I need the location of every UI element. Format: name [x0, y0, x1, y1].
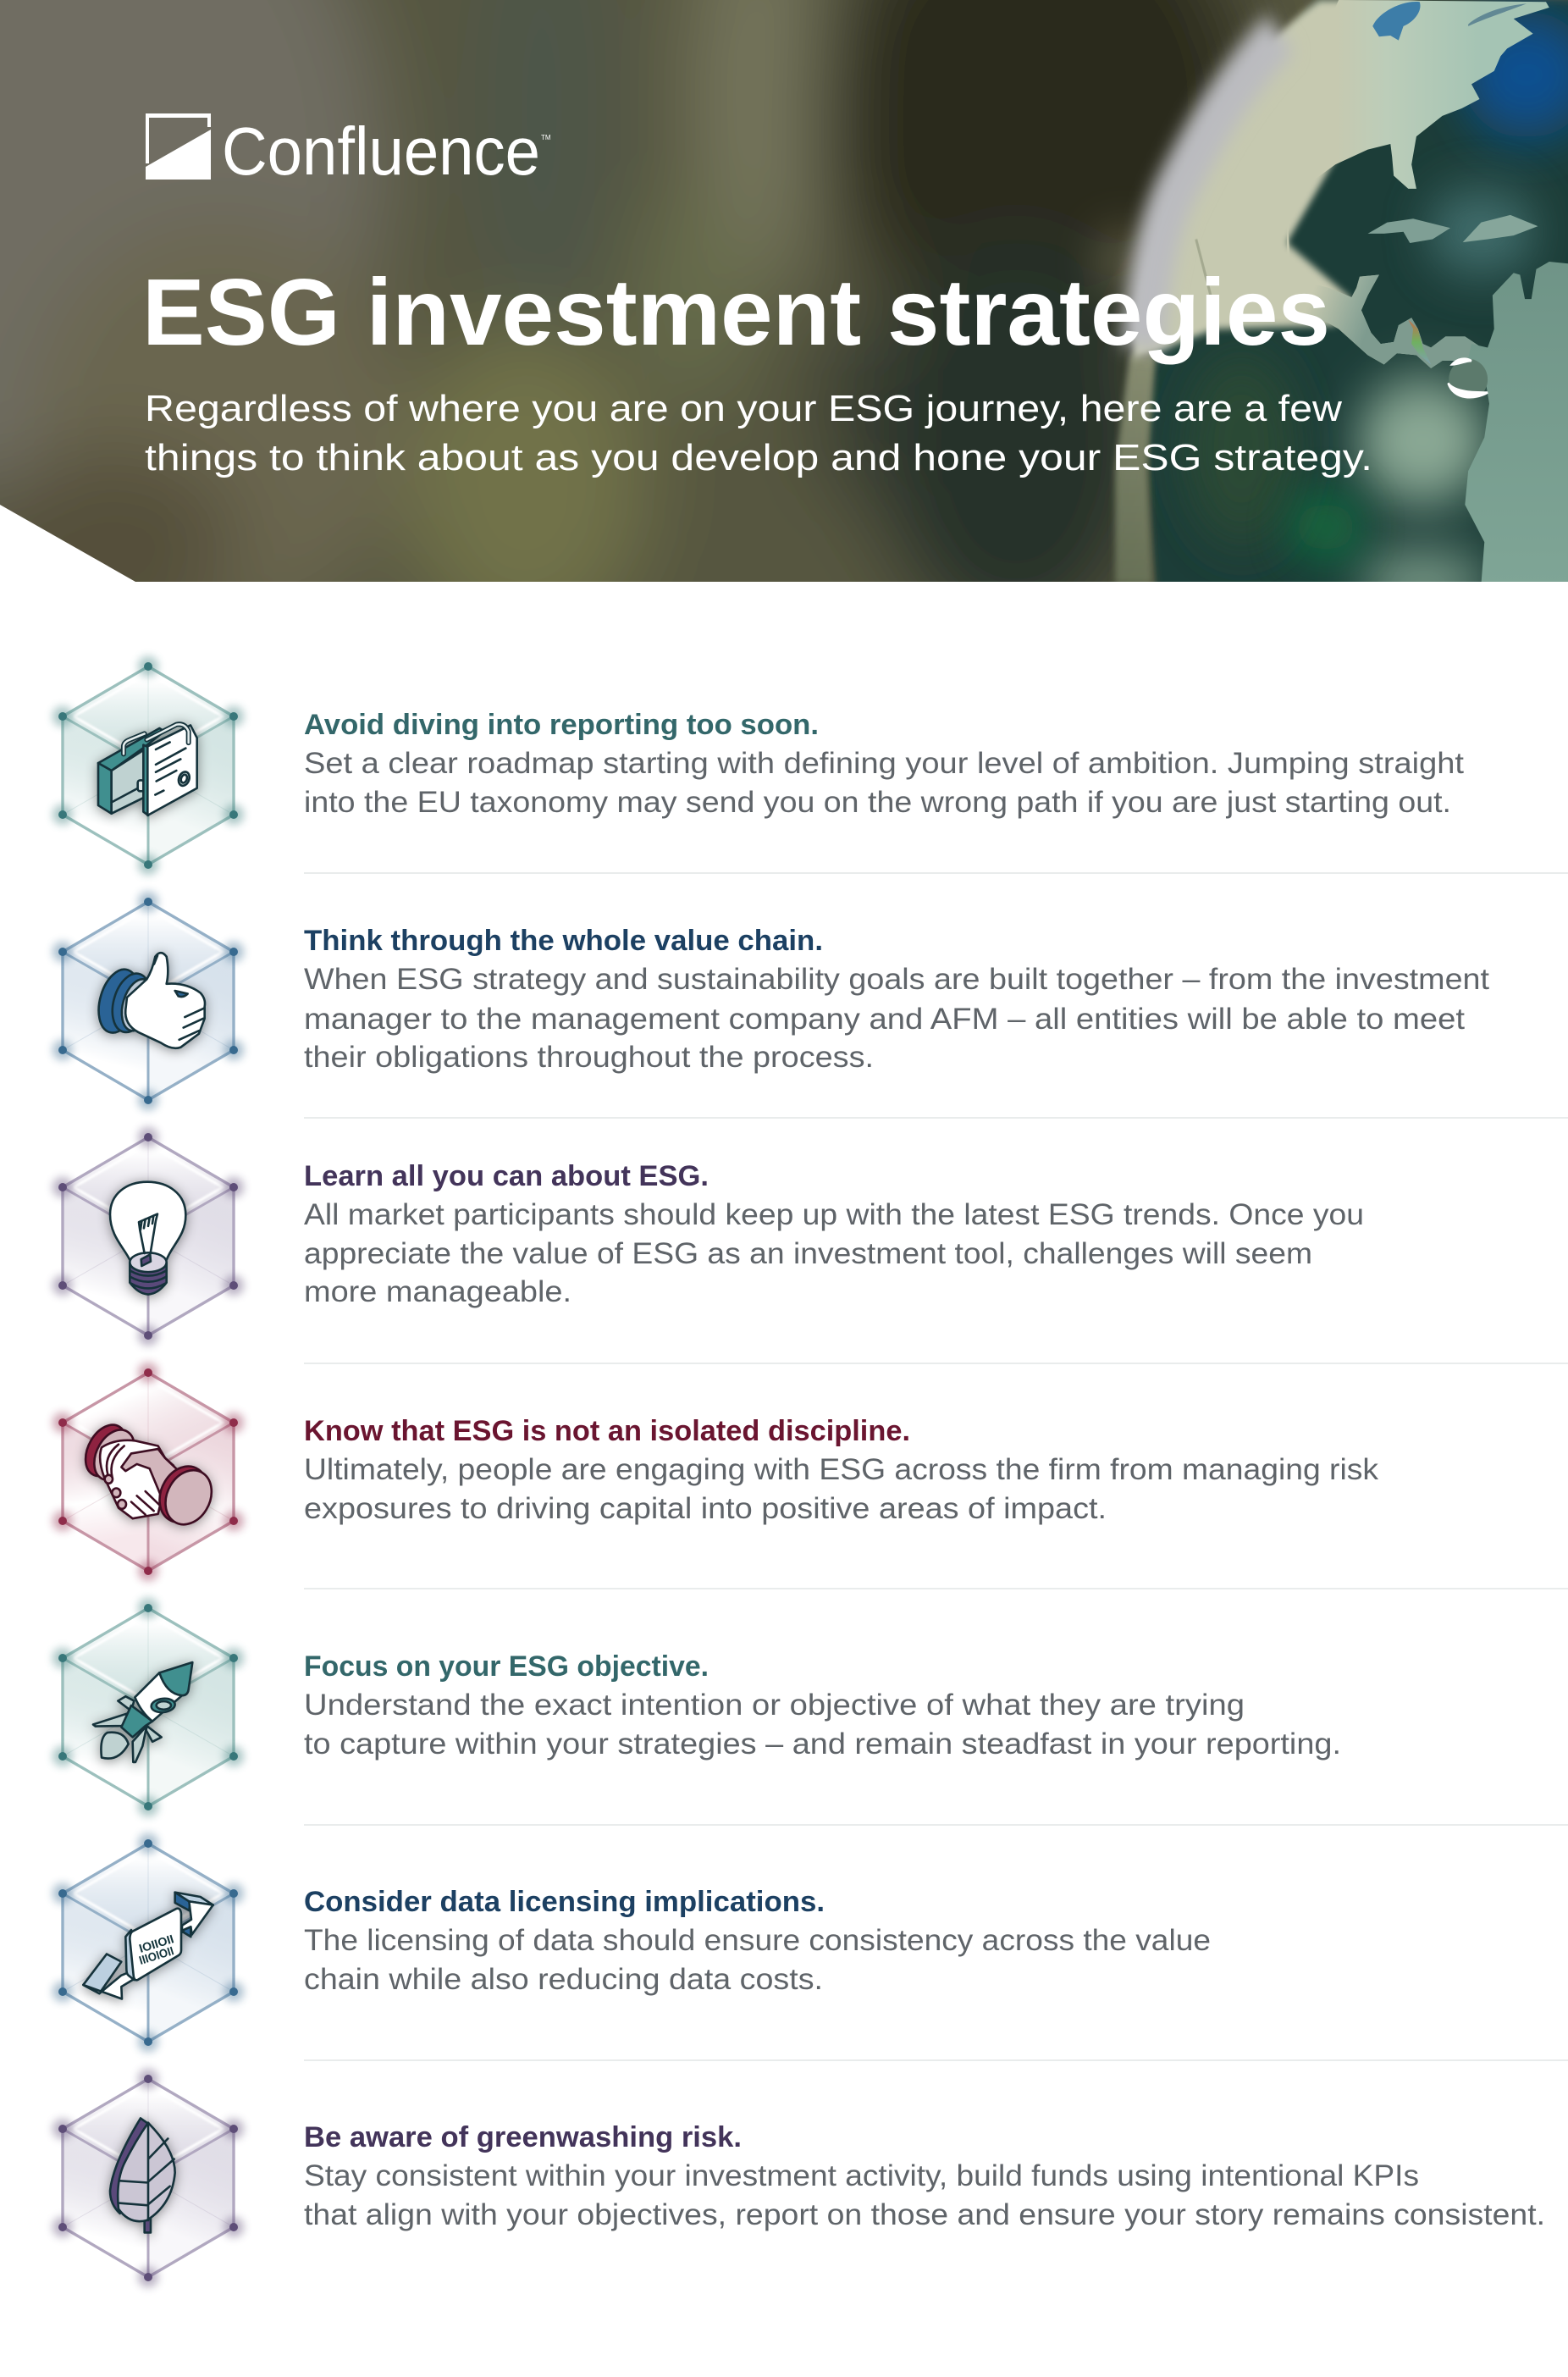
body text — [304, 1924, 1211, 1996]
heading: Consider data licensing implications. — [304, 1886, 825, 1918]
icon: rocket in cube — [52, 1598, 244, 1816]
body text — [304, 1198, 1364, 1308]
great lakes — [1372, 2, 1420, 41]
binary digits on card: IOIIOII — [137, 1932, 175, 1955]
heading: Be aware of greenwashing risk. — [304, 2121, 742, 2153]
body text: manager to the management company and AFM – all entities will be able to meet — [304, 1003, 1465, 1036]
icon: briefcase and document in cube — [52, 656, 244, 875]
body text — [304, 963, 1489, 1074]
binary digits on card: IIIOIOII — [137, 1943, 175, 1967]
subtitle: things to think about as you develop and hone your ESG strategy. — [145, 437, 1372, 478]
body text — [304, 2159, 1545, 2231]
title: ESG investment strategies — [142, 260, 1330, 365]
item 7: greenwashing risk — [52, 2069, 1545, 2287]
body text: All market participants should keep up with the latest ESG trends. Once you — [304, 1198, 1364, 1231]
body text — [304, 1453, 1379, 1525]
body text: more manageable. — [304, 1275, 571, 1308]
item 6: data licensing — [52, 1833, 1211, 2052]
body text — [304, 1689, 1341, 1761]
body text: to capture within your strategies – and remain steadfast in your reporting. — [304, 1727, 1341, 1761]
logo: Confluence: Confluence — [222, 113, 540, 189]
subtitle: Regardless of where you are on your ESG journey, here are a few — [145, 388, 1342, 429]
logo: Confluence: TM — [541, 134, 551, 141]
item 2: value chain — [52, 892, 1489, 1110]
binary digits on card — [137, 1932, 175, 1967]
lower rim band — [1115, 355, 1156, 584]
north and central america — [1287, 0, 1549, 368]
body text: The licensing of data should ensure consistency across the value — [304, 1924, 1211, 1957]
heading: Think through the whole value chain. — [304, 925, 823, 957]
white corner notch — [0, 505, 135, 582]
icon: data card with arrows in cube — [52, 1833, 244, 2052]
body text: into the EU taxonomy may send you on the wrong path if you are just starting out. — [304, 786, 1451, 819]
body text: Understand the exact intention or objective of what they are trying — [304, 1689, 1245, 1722]
globe photo — [1099, 0, 1568, 613]
item 3: learn about ESG — [52, 1127, 1364, 1346]
body text: chain while also reducing data costs. — [304, 1963, 823, 1996]
item 1: avoid diving — [52, 656, 1464, 875]
item 5: focus on objective — [52, 1598, 1341, 1816]
caribbean islands — [1368, 218, 1450, 243]
header blurred photo background — [0, 0, 1568, 582]
icon: leaf in cube — [52, 2069, 244, 2287]
body text: appreciate the value of ESG as an investment tool, challenges will seem — [304, 1237, 1312, 1270]
heading: Know that ESG is not an isolated discipline. — [304, 1415, 910, 1447]
item 4: not an isolated discipline — [52, 1363, 1379, 1581]
subtitle — [145, 388, 1372, 478]
icon: light bulb in cube — [52, 1127, 244, 1346]
body text: When ESG strategy and sustainability goals are built together – from the investment — [304, 963, 1489, 996]
water droplet — [1449, 359, 1488, 400]
body text: their obligations throughout the process. — [304, 1041, 874, 1074]
panel: header banner — [0, 0, 1568, 582]
heading: Learn all you can about ESG. — [304, 1160, 709, 1192]
body text: Set a clear roadmap starting with defining your level of ambition. Jumping straight — [304, 747, 1464, 780]
body text: exposures to driving capital into positive areas of impact. — [304, 1492, 1107, 1525]
heading: Avoid diving into reporting too soon. — [304, 709, 819, 741]
icon: handshake in cube — [52, 1363, 244, 1581]
body text: Ultimately, people are engaging with ESG across the firm from managing risk — [304, 1453, 1379, 1486]
icon: thumbs up in cube — [52, 892, 244, 1110]
body text: that align with your objectives, report on those and ensure your story remains consistent. — [304, 2198, 1545, 2231]
upper pale rim — [1133, 0, 1416, 359]
south america — [1465, 262, 1568, 584]
heading: Focus on your ESG objective. — [304, 1650, 709, 1683]
body text: Stay consistent within your investment activity, build funds using intentional KPIs — [304, 2159, 1419, 2192]
rainbow refraction — [1408, 319, 1431, 364]
body text — [304, 747, 1464, 819]
